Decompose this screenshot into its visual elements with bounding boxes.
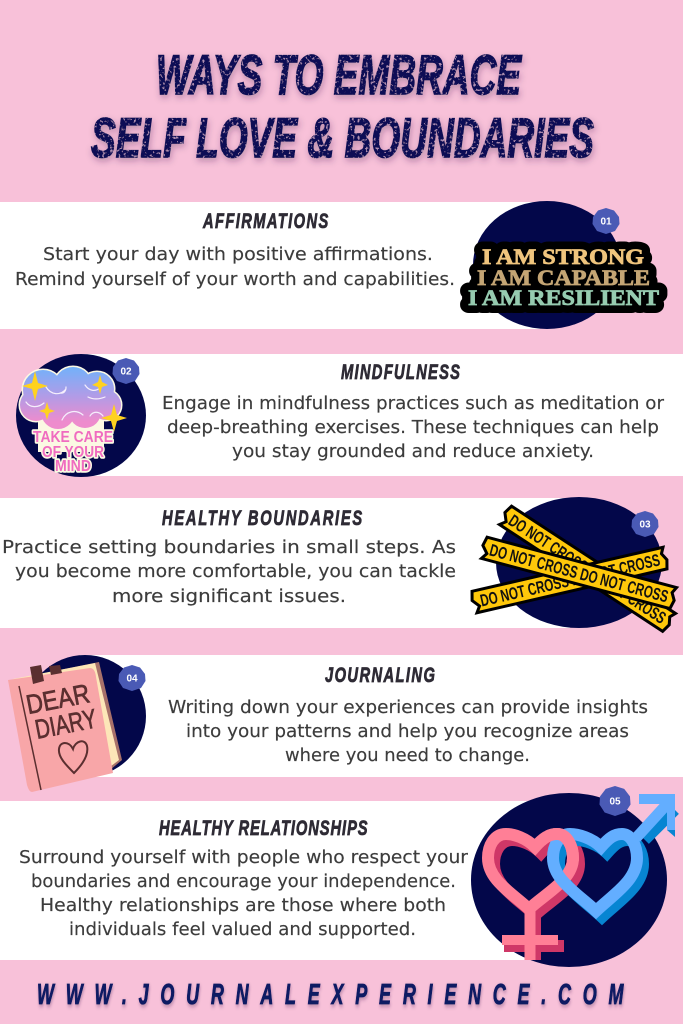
text block: mindfulness bbox=[162, 393, 665, 462]
text block: affirmations: Remind yourself of your worth and capabilities. bbox=[15, 269, 455, 290]
text block: mindfulness: deep-breathing exercises. These techniques can help bbox=[167, 417, 659, 438]
text block: journaling: Writing down your experiences can provide insights bbox=[168, 697, 648, 718]
heading: affirmations: AFFIRMATIONS bbox=[202, 209, 328, 233]
badge 05 bbox=[599, 786, 631, 816]
icon: dear diary book: DEAR bbox=[24, 678, 92, 720]
badge 02: 02 bbox=[120, 366, 132, 378]
panel: healthy boundaries bbox=[0, 497, 677, 632]
icon: take care of your mind: TAKE CARE bbox=[33, 429, 113, 446]
heading: healthy relationships: HEALTHY RELATIONSHIPS bbox=[159, 816, 368, 840]
badge 03 bbox=[632, 511, 658, 537]
bookmarks bbox=[30, 665, 62, 684]
badge 04: 04 bbox=[126, 674, 138, 684]
text block: journaling bbox=[168, 697, 648, 766]
text block: healthy relationships: boundaries and encourage your independence. bbox=[31, 871, 456, 892]
panel: mindfulness bbox=[16, 354, 683, 477]
badge 03: 03 bbox=[639, 520, 651, 530]
text block: journaling: into your patterns and help you recognize areas bbox=[186, 721, 629, 742]
title: SELF LOVE & BOUNDARIES bbox=[91, 107, 594, 170]
icon: take care of your mind bbox=[16, 354, 146, 477]
icon: dear diary book bbox=[8, 655, 146, 792]
icon: I am strong sticker: I AM RESILIENT bbox=[468, 285, 659, 310]
heading: mindfulness: MINDFULNESS bbox=[341, 360, 460, 384]
text block: healthy relationships: Surround yourself with people who respect your bbox=[19, 847, 469, 868]
heart shadows bbox=[494, 804, 675, 960]
icon: I am strong sticker: I AM CAPABLE bbox=[477, 265, 650, 290]
panel: affirmations bbox=[0, 201, 659, 329]
badge 04 bbox=[118, 665, 146, 691]
icon: interlocked hearts bbox=[471, 793, 675, 967]
panel: journaling bbox=[8, 655, 683, 792]
blue male symbol bbox=[553, 803, 668, 911]
text block: healthy boundaries: you become more comfortable, you can tackle bbox=[15, 561, 456, 582]
icon: take care of your mind: MIND bbox=[55, 458, 91, 475]
badge 01: 01 bbox=[600, 216, 612, 228]
badge 02 bbox=[112, 358, 140, 384]
icon: I am strong sticker: I AM STRONG bbox=[482, 244, 644, 269]
title bbox=[91, 44, 594, 170]
text block: healthy relationships: Healthy relationships are those where both bbox=[40, 895, 446, 916]
icon: do not cross tape bbox=[470, 497, 677, 632]
icon: I am strong sticker bbox=[468, 201, 659, 329]
title: WAYS TO EMBRACE bbox=[156, 44, 522, 107]
footer url: WWW.JOURNALEXPERIENCE.COM bbox=[37, 979, 624, 1011]
icon: take care of your mind: OF YOUR bbox=[42, 444, 104, 461]
icon: I am strong sticker: I AM RESILIENT bbox=[468, 285, 659, 310]
panel: healthy relationships bbox=[0, 786, 675, 967]
text block: healthy boundaries: Practice setting boundaries in small steps. As bbox=[2, 537, 456, 558]
icon: dear diary book: DIARY bbox=[33, 704, 99, 745]
text block: healthy relationships: individuals feel valued and supported. bbox=[69, 919, 416, 940]
icon: I am strong sticker: I AM STRONG bbox=[482, 244, 644, 269]
text block: mindfulness: you stay grounded and reduce anxiety. bbox=[232, 441, 594, 462]
icon: I am strong sticker: I AM CAPABLE bbox=[477, 265, 650, 290]
text block: journaling: where you need to change. bbox=[285, 745, 530, 766]
pink female symbol bbox=[488, 834, 573, 960]
text block: healthy boundaries: more significant issues. bbox=[112, 586, 346, 607]
badge 01 bbox=[592, 208, 620, 234]
heading: journaling: JOURNALING bbox=[325, 663, 435, 687]
heading: healthy boundaries: HEALTHY BOUNDARIES bbox=[162, 506, 362, 530]
text block: mindfulness: Engage in mindfulness practices such as meditation or bbox=[162, 393, 665, 414]
text block: healthy relationships bbox=[19, 847, 469, 940]
overlap weave bbox=[545, 828, 579, 861]
text block: healthy boundaries bbox=[2, 537, 456, 607]
text block: affirmations: Start your day with positive affirmations. bbox=[43, 244, 433, 265]
badge 05: 05 bbox=[609, 796, 621, 808]
text block: affirmations bbox=[15, 244, 455, 290]
